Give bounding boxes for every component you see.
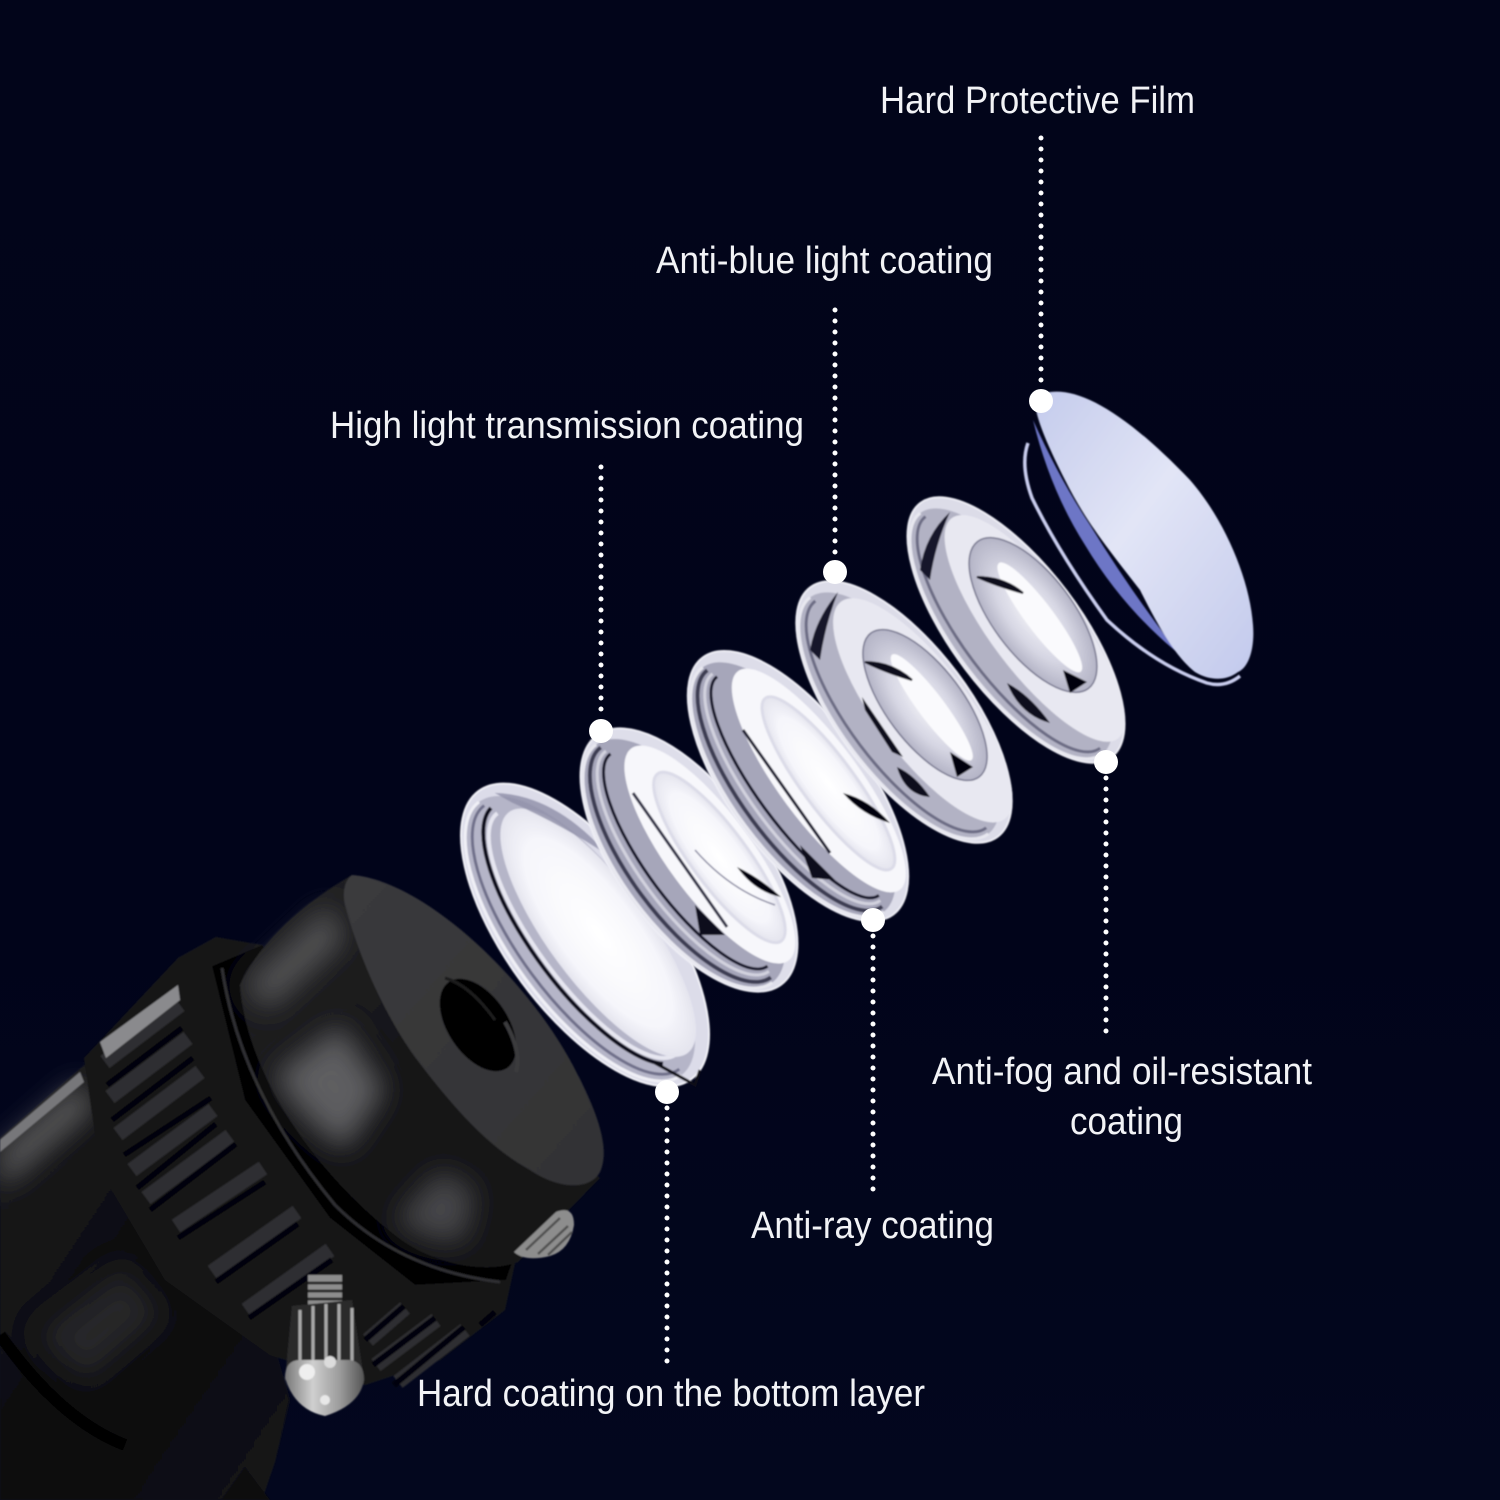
rear tube [0,1062,290,1500]
dotted leader: anti-ray coating [861,908,885,1190]
cap centre hole [424,965,532,1085]
black ring [212,945,520,1285]
lens 4: anti-blue light coating [757,548,1051,876]
lens 3: anti-ray coating [647,616,949,956]
film rim [1025,443,1240,684]
lens 5: anti-fog and oil-resistant coating [869,465,1163,795]
label: anti-fog and oil-resistant coating: coating [1070,1101,1183,1143]
cap top face [344,875,604,1185]
lens 1: hard coating bottom layer [415,744,755,1126]
side highlights [275,1025,385,1150]
front thumb screw [285,1275,364,1416]
label: anti-ray coating: Anti-ray coating [751,1205,994,1247]
dotted leader: anti-fog and oil-resistant coating [1094,750,1118,1032]
lens 6: hard protective film [1025,392,1253,684]
cap cylinder side [240,875,600,1267]
dotted leader: anti-blue light coating [823,310,847,584]
label: anti-fog and oil-resistant coating: Anti-fog and oil-resistant [932,1051,1312,1093]
label: hard coating on the bottom layer: Hard coating on the bottom layer [417,1373,925,1415]
knurled ring teeth [100,985,495,1385]
dotted leader: hard protective film [1029,138,1053,413]
camera eyepiece body [0,875,604,1500]
lens 2: high light transmission coating [540,693,838,1027]
label: high light transmission coating: High light transmission coating [330,405,804,447]
film blue edge [1033,420,1200,670]
film face [1036,392,1253,679]
collar ring [84,937,520,1385]
label: anti-blue light coating: Anti-blue light coating [656,240,993,282]
label: anti-fog and oil-resistant coating [932,1051,1312,1143]
dotted leader: high light transmission coating [589,467,613,743]
rear knurled screw [514,1210,574,1258]
dotted leader: hard coating on bottom layer [655,1080,679,1362]
label: hard protective film: Hard Protective Film [880,80,1195,122]
